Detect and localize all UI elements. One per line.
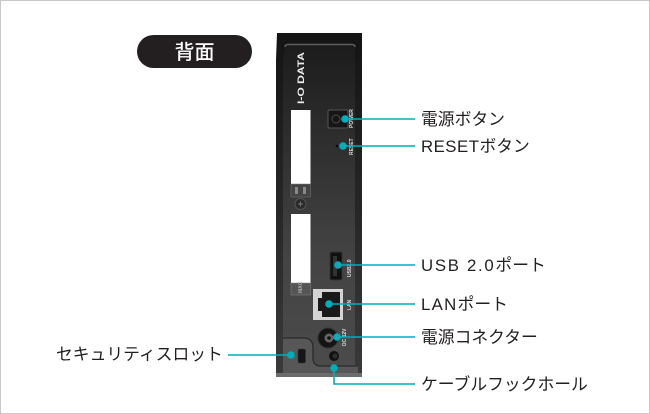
device rear panel <box>276 33 362 377</box>
white label 2 <box>291 214 310 283</box>
callout: 電源ボタン: 電源ボタン <box>421 110 505 129</box>
callout: 電源ボタン <box>341 110 505 129</box>
MAC label box: MAC <box>298 281 304 293</box>
white label 1 <box>291 110 310 184</box>
LAN marking: LAN <box>347 299 353 310</box>
callout: RESETボタン: RESETボタン <box>421 137 530 156</box>
brand logo: I-O DATA: I-O DATA <box>296 52 307 104</box>
security slot <box>298 349 306 363</box>
heading pill: 背面 <box>137 35 252 68</box>
cable hook hole <box>329 351 339 361</box>
MAC label box <box>291 281 310 295</box>
callout: LANポート: LANポート <box>421 295 508 314</box>
power button <box>328 110 348 128</box>
callout: USB 2.0ポート <box>334 256 546 275</box>
small label box <box>291 184 310 197</box>
DC power jack <box>318 328 338 348</box>
callout: 電源コネクター <box>333 328 538 347</box>
reset pinhole <box>336 145 338 147</box>
USB port <box>330 252 342 280</box>
callout: ケーブルフックホール: ケーブルフックホール <box>421 374 588 394</box>
callout: ケーブルフックホール <box>330 364 588 394</box>
heading pill: 背面: 背面 <box>174 41 214 64</box>
callout: 電源コネクター: 電源コネクター <box>421 328 538 347</box>
USB marking: USB2.0 <box>347 259 353 277</box>
RESET marking: RESET <box>349 138 355 155</box>
callout: LANポート <box>325 295 508 314</box>
callout: USB 2.0ポート: USB 2.0ポート <box>421 256 546 275</box>
POWER marking: POWER <box>349 109 355 128</box>
callout: セキュリティスロット <box>56 345 295 364</box>
screw <box>295 198 306 210</box>
LAN port <box>313 289 343 320</box>
callout: RESETボタン <box>339 137 530 156</box>
callout: セキュリティスロット: セキュリティスロット <box>56 345 223 364</box>
DC marking: DC 12V <box>342 328 348 346</box>
